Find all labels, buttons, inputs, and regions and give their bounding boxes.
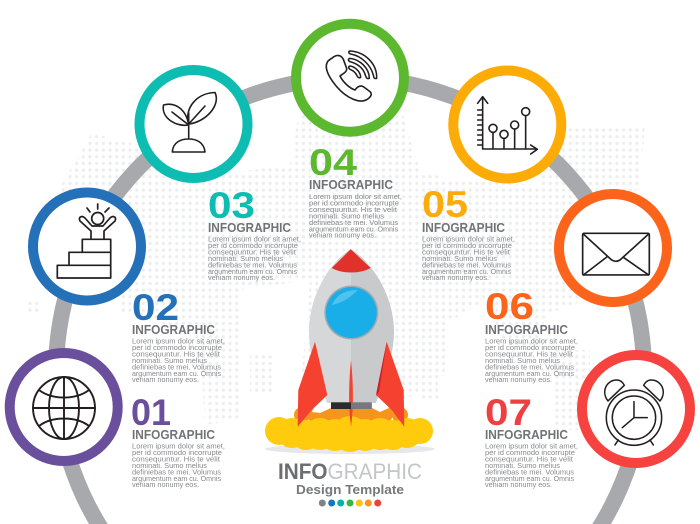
text block 01: argumentum eam cu. Omnis bbox=[132, 474, 221, 483]
icon ring 07: alarm clock bbox=[582, 355, 690, 463]
text block 07: 07 bbox=[485, 392, 532, 433]
text block 01: Lorem ipsum dolor sit amet, bbox=[132, 442, 225, 450]
icon ring 02: person on stairs bbox=[33, 192, 141, 300]
icon ring 05: chart bbox=[453, 70, 561, 178]
text block 02: Lorem ipsum dolor sit amet, bbox=[132, 336, 225, 346]
text block 03: definiebas te mei. Volumus bbox=[208, 260, 297, 269]
text block 07: per id commodo incorrupte bbox=[485, 448, 575, 457]
text block 06: nominati. Sumo melius bbox=[485, 356, 560, 365]
text block 04: nominati. Sumo melius bbox=[309, 211, 384, 220]
text block 02: veniam nonumy eos. bbox=[132, 375, 199, 384]
text block 02: consequuntur. His te velit bbox=[132, 349, 220, 358]
text block 06: 06 bbox=[485, 286, 534, 327]
bottom title: INFOGRAPHIC bbox=[278, 459, 422, 484]
icon ring 01: globe bbox=[10, 353, 118, 461]
text block 02: INFOGRAPHIC bbox=[132, 323, 215, 337]
text block 04: argumentum eam cu. Omnis bbox=[309, 224, 398, 233]
icon ring 03: plant bbox=[140, 70, 248, 178]
text block 05: INFOGRAPHIC bbox=[422, 221, 505, 235]
dotted world map background bbox=[25, 105, 645, 430]
main grey arc bbox=[48, 70, 652, 524]
text block 03: veniam nonumy eos. bbox=[208, 273, 275, 282]
text block 06: Lorem ipsum dolor sit amet, bbox=[485, 336, 578, 346]
text block 03: Lorem ipsum dolor sit amet, bbox=[208, 234, 301, 244]
text block 04: veniam nonumy eos. bbox=[309, 231, 376, 240]
text block 05: argumentum eam cu. Omnis bbox=[422, 267, 511, 276]
text block 07: veniam nonumy eos. bbox=[485, 480, 552, 489]
text block 03: INFOGRAPHIC bbox=[208, 221, 291, 235]
text block 04: 04 bbox=[309, 142, 357, 183]
text block 06 bbox=[485, 286, 578, 384]
text block 06: consequuntur. His te velit bbox=[485, 349, 573, 358]
text block 01: 01 bbox=[131, 392, 171, 433]
text block 02: definiebas te mei. Volumus bbox=[132, 362, 221, 371]
text block 07 bbox=[485, 392, 578, 489]
text block 05: per id commodo incorrupte bbox=[422, 241, 512, 250]
text block 06: veniam nonumy eos. bbox=[485, 375, 552, 384]
text block 05: consequuntur. His te velit bbox=[422, 247, 510, 256]
text block 01: per id commodo incorrupte bbox=[132, 448, 222, 457]
text block 03: argumentum eam cu. Omnis bbox=[208, 267, 297, 276]
text block 04: consequuntur. His te velit bbox=[309, 205, 397, 214]
text block 02: per id commodo incorrupte bbox=[132, 343, 222, 352]
text block 05 bbox=[422, 184, 515, 282]
text block 02: nominati. Sumo melius bbox=[132, 356, 207, 365]
text block 01: INFOGRAPHIC bbox=[132, 428, 215, 442]
text block 07: consequuntur. His te velit bbox=[485, 454, 573, 463]
text block 05: veniam nonumy eos. bbox=[422, 273, 489, 282]
text block 03 bbox=[208, 185, 301, 282]
text block 03: consequuntur. His te velit bbox=[208, 247, 296, 256]
text block 02 bbox=[132, 287, 225, 384]
icon ring 04: telephone bbox=[296, 24, 404, 132]
text block 05: Lorem ipsum dolor sit amet, bbox=[422, 234, 515, 244]
text block 07: definiebas te mei. Volumus bbox=[485, 467, 574, 476]
text block 03: per id commodo incorrupte bbox=[208, 241, 298, 250]
text block 01: veniam nonumy eos. bbox=[132, 480, 199, 489]
text block 06: argumentum eam cu. Omnis bbox=[485, 369, 574, 378]
text block 06: INFOGRAPHIC bbox=[485, 323, 568, 337]
text block 05: 05 bbox=[422, 184, 468, 225]
text block 03: nominati. Sumo melius bbox=[208, 254, 283, 263]
text block 04: Lorem ipsum dolor sit amet, bbox=[309, 192, 402, 201]
text block 07: argumentum eam cu. Omnis bbox=[485, 474, 574, 483]
seven colour dots bbox=[319, 500, 381, 506]
text block 03: 03 bbox=[208, 185, 255, 226]
text block 02: 02 bbox=[132, 287, 179, 328]
text block 01 bbox=[131, 392, 225, 489]
rocket illustration bbox=[265, 249, 435, 454]
text block 01: definiebas te mei. Volumus bbox=[132, 467, 221, 476]
text block 04 bbox=[309, 142, 402, 240]
text block 04: per id commodo incorrupte bbox=[309, 198, 399, 208]
text block 07: Lorem ipsum dolor sit amet, bbox=[485, 442, 578, 450]
bottom title bbox=[278, 459, 422, 497]
text block 04: INFOGRAPHIC bbox=[309, 178, 393, 192]
text block 06: definiebas te mei. Volumus bbox=[485, 362, 574, 371]
text block 01: nominati. Sumo melius bbox=[132, 461, 207, 470]
text block 07: nominati. Sumo melius bbox=[485, 461, 560, 470]
text block 05: nominati. Sumo melius bbox=[422, 254, 497, 263]
icon ring 06: envelope bbox=[559, 194, 667, 302]
text block 05: definiebas te mei. Volumus bbox=[422, 260, 511, 269]
text block 06: per id commodo incorrupte bbox=[485, 343, 575, 352]
text block 01: consequuntur. His te velit bbox=[132, 454, 220, 463]
text block 04: definiebas te mei. Volumus bbox=[309, 218, 398, 227]
text block 02: argumentum eam cu. Omnis bbox=[132, 369, 221, 378]
text block 07: INFOGRAPHIC bbox=[485, 428, 568, 442]
bottom title: Design Template bbox=[296, 482, 404, 497]
